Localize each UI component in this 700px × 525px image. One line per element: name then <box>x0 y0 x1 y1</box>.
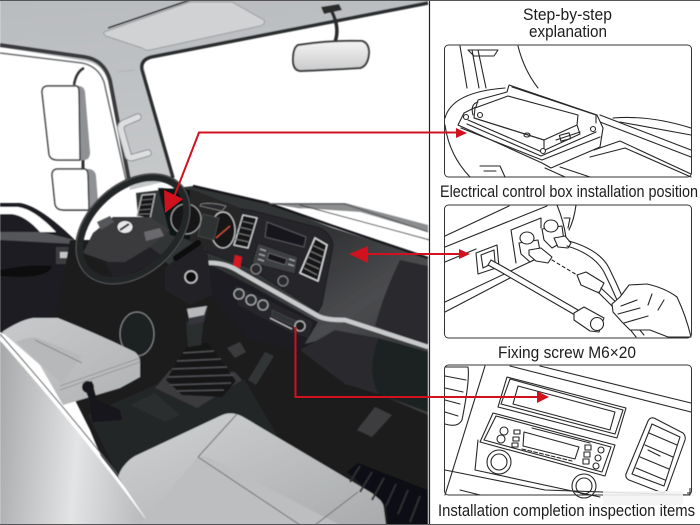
line art: cables <box>567 241 644 337</box>
display <box>265 222 306 247</box>
tick mark <box>687 488 691 493</box>
icon: hand holding cable <box>612 284 691 337</box>
center console surround <box>206 204 333 312</box>
radio <box>251 243 298 286</box>
silver trim <box>207 263 428 347</box>
rear view mirror <box>293 4 369 71</box>
sun visor <box>104 0 264 50</box>
driver seat backrest <box>0 334 156 525</box>
line art: right vent <box>626 418 685 493</box>
windscreen wipers <box>267 203 430 240</box>
side mirror lower <box>52 160 98 211</box>
dashboard body <box>136 186 428 415</box>
passenger seat cushion <box>118 413 386 525</box>
line art: connectors <box>519 220 577 275</box>
heading: step-by-step explanation <box>523 6 612 41</box>
climate control panel <box>234 285 313 338</box>
side mirror upper <box>42 68 90 160</box>
heading: step-by-step explanation: explanation <box>529 23 607 41</box>
grab handle <box>121 117 148 158</box>
pedals <box>227 342 274 385</box>
caption: fixing screw: Fixing screw M6×20 <box>498 344 636 362</box>
line art: radio <box>445 413 690 497</box>
right air vent <box>300 238 327 281</box>
line art: left vent <box>445 367 468 425</box>
handbrake lever <box>82 381 122 422</box>
hazard switch <box>233 255 242 268</box>
steering column and ignition <box>165 240 212 305</box>
center air vent <box>234 215 257 248</box>
instrument cluster <box>158 188 240 250</box>
panel 1: electrical control box line drawing <box>444 45 692 177</box>
driver seat cushion <box>2 318 140 405</box>
line art: knobs <box>487 450 596 498</box>
line art: rod and nut <box>488 260 604 332</box>
line art: control box <box>458 85 603 168</box>
photo: truck cab interior <box>0 0 430 525</box>
panel 3: radio and display line drawing <box>444 365 692 498</box>
heading: step-by-step explanation: Step-by-step <box>523 6 612 24</box>
steering wheel <box>55 152 211 306</box>
roof and A-pillar <box>0 0 428 190</box>
watermark blur <box>603 491 683 505</box>
speaker <box>120 312 154 356</box>
floor mat <box>347 407 428 525</box>
panel 2: fixing screw line drawing <box>444 205 692 338</box>
centre console <box>88 380 280 480</box>
door panel <box>0 203 80 350</box>
line art: dash lines and display frame <box>445 366 691 495</box>
arrow: fixing screw to dashboard <box>349 246 470 263</box>
gear shift <box>155 306 242 408</box>
line art: dashboard background <box>445 46 691 177</box>
floor and lower cab <box>50 240 428 525</box>
arrow: control box to steering column <box>164 128 467 213</box>
panel divider <box>428 0 430 525</box>
arrow: inspection to radio panel <box>296 327 549 403</box>
left air vent <box>137 194 155 219</box>
line art: bracket panel <box>445 205 576 312</box>
